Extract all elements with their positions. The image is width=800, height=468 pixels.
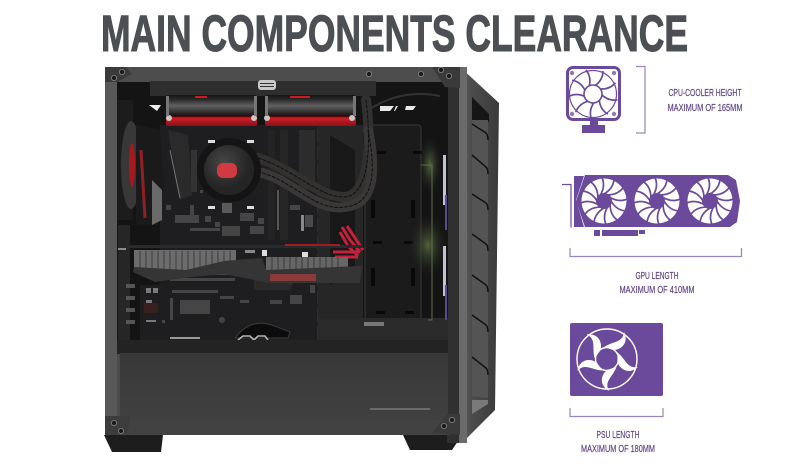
label: PSU length: PSU LENGTH: [596, 430, 640, 441]
bracket: GPU length: [570, 248, 742, 256]
PSU shroud: [105, 340, 450, 435]
label: CPU cooler height: MAXIMUM OF 165MM: [668, 103, 742, 114]
case feet: [104, 435, 462, 452]
label: CPU cooler height: CPU-COOLER HEIGHT: [668, 88, 742, 99]
motherboard: [140, 125, 320, 346]
case interior: [117, 82, 448, 342]
front panel: [460, 67, 499, 443]
label: CPU cooler height: [668, 88, 742, 114]
icon: GPU: [562, 175, 740, 236]
radiator bar with logo: [150, 80, 376, 96]
red power cables: [333, 226, 363, 257]
corner brackets with screws: [105, 67, 460, 435]
right cable backplate: [318, 94, 448, 342]
icon: CPU cooler: [566, 66, 621, 133]
case body frame: [105, 67, 461, 435]
VRM heatsinks: [136, 125, 197, 225]
label: PSU length: [581, 430, 655, 455]
coolant tubes: [258, 100, 372, 208]
bracket: CPU cooler height: [636, 66, 645, 133]
label: GPU length: [620, 271, 694, 296]
icon: PSU: [570, 323, 663, 396]
graphics card: [127, 244, 363, 283]
label: GPU length: GPU LENGTH: [636, 271, 678, 282]
RAM modules: [268, 130, 315, 240]
label: PSU length: MAXIMUM OF 180MM: [581, 444, 655, 455]
bracket: PSU length: [570, 408, 663, 416]
top radiator fans: [166, 95, 356, 126]
CPU water block: [197, 138, 261, 213]
PC case photo: [104, 67, 499, 452]
rear fan and IO: [117, 100, 141, 340]
label: GPU length: MAXIMUM OF 410MM: [620, 285, 694, 296]
